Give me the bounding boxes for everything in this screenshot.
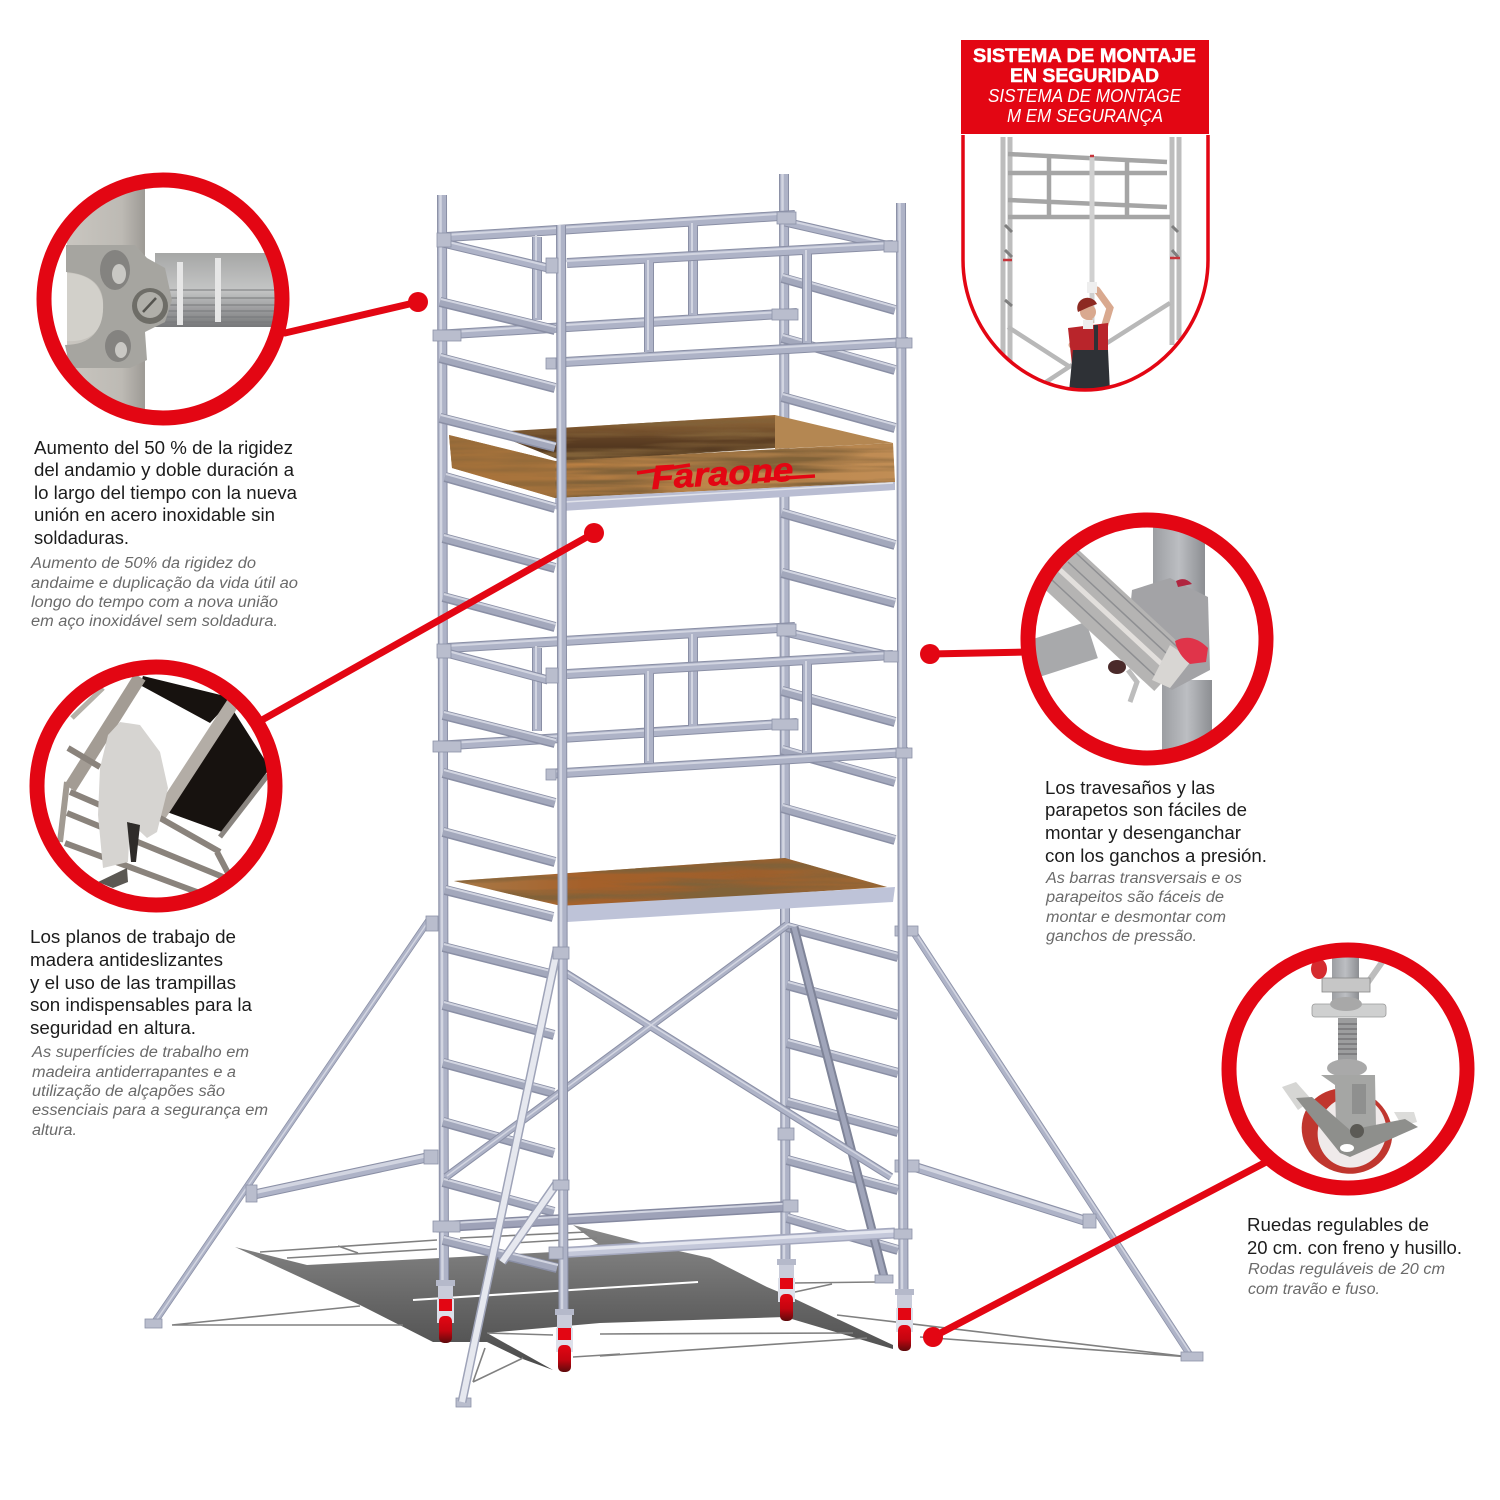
leader line: platform callout xyxy=(262,523,604,720)
rear uprights xyxy=(440,174,786,1292)
text: platform description: madera antideslizantes xyxy=(30,949,223,970)
text: platform description: Los planos de trabajo de xyxy=(30,926,236,947)
text: platform description: y el uso de las trampillas xyxy=(30,972,236,993)
text: joint description: unión en acero inoxidable sin xyxy=(34,504,275,525)
leader line: wheel callout xyxy=(923,1161,1268,1347)
text: platform description: essenciais para a segurança em xyxy=(32,1102,268,1119)
text: platform description: son indispensables para la xyxy=(30,994,253,1015)
text: wheel description: Ruedas regulables de xyxy=(1247,1214,1429,1235)
photo: hook joint xyxy=(1036,528,1212,750)
front uprights xyxy=(560,203,904,1322)
text: joint description: soldaduras. xyxy=(34,527,129,548)
leader line: hook callout xyxy=(920,644,1028,664)
text: platform description: altura. xyxy=(32,1122,77,1139)
ground shadow xyxy=(172,1225,1190,1382)
shield photo: worker raising tower xyxy=(1000,137,1182,388)
text: joint description: Aumento de 50% da rigidez do xyxy=(30,555,256,572)
text: joint description: lo largo del tiempo con la nueva xyxy=(34,482,298,503)
text: wheel description: Rodas reguláveis de 20 cm xyxy=(1248,1261,1445,1278)
callout: stainless steel joint detail xyxy=(37,173,289,425)
castor wheels xyxy=(436,1259,914,1372)
shield header: SISTEMA DE MONTAGE xyxy=(988,85,1182,106)
callout: pressure hook detail xyxy=(1022,513,1274,765)
ring xyxy=(37,667,275,905)
ring xyxy=(44,180,282,418)
text: hook description: ganchos de pressão. xyxy=(1046,928,1197,945)
scaffold tower xyxy=(145,174,1203,1407)
front outrigger xyxy=(462,950,557,1402)
text: hook description: As barras transversais e os xyxy=(1045,870,1242,887)
text: joint description: del andamio y doble duración a xyxy=(34,459,295,480)
front guard rails xyxy=(546,243,908,774)
callout: trapdoor platform detail xyxy=(31,660,283,912)
text: hook description xyxy=(1045,777,1267,945)
upper wooden platform xyxy=(449,415,895,511)
text: platform description xyxy=(30,926,268,1139)
side guard rails xyxy=(443,220,891,680)
wheel: front left xyxy=(555,1309,574,1372)
text: hook description: parapeitos são fáceis de xyxy=(1045,889,1224,906)
text: hook description: montar y desenganchar xyxy=(1045,822,1241,843)
lower wooden platform xyxy=(454,858,895,922)
rear guard rails xyxy=(435,213,797,746)
text: platform description: utilização de alçapões são xyxy=(32,1083,225,1100)
faraone logo: Faraone xyxy=(650,451,794,496)
shield header xyxy=(961,40,1209,134)
text: platform description: seguridad en altura. xyxy=(30,1017,196,1038)
rail clamps xyxy=(433,212,912,1259)
shield header: SISTEMA DE MONTAJE xyxy=(973,45,1196,67)
side outriggers xyxy=(154,919,1191,1355)
wheel: rear right xyxy=(777,1259,796,1321)
ring xyxy=(1229,950,1467,1188)
text: wheel description: com travão e fuso. xyxy=(1248,1281,1380,1298)
diagonal braces xyxy=(446,924,892,1177)
text: joint description: Aumento del 50 % de la rigidez xyxy=(34,437,293,458)
outrigger feet xyxy=(145,916,1203,1407)
text: wheel description: 20 cm. con freno y husillo. xyxy=(1247,1237,1462,1258)
shield header: M EM SEGURANÇA xyxy=(1007,105,1163,126)
photo: worker climbing through trapdoor xyxy=(58,676,268,892)
text: joint description: andaime e duplicação da vida útil ao xyxy=(31,575,298,592)
text: platform description: As superfícies de trabalho em xyxy=(31,1044,249,1061)
text: wheel description xyxy=(1247,1214,1462,1298)
rear stabilizer xyxy=(794,927,884,1277)
text: hook description: con los ganchos a presión. xyxy=(1045,845,1267,866)
photo: joint xyxy=(65,189,274,409)
right frame rungs xyxy=(782,275,899,1250)
ring xyxy=(1028,520,1266,758)
text: joint description xyxy=(30,437,298,630)
shield outline xyxy=(963,135,1208,390)
text: platform description: madeira antiderrapantes e a xyxy=(32,1064,236,1081)
left frame rungs xyxy=(440,299,558,1268)
leader line: joint callout xyxy=(285,292,428,333)
wheel: rear left xyxy=(436,1280,455,1343)
lower horizontal rails xyxy=(436,1203,895,1253)
photo: castor wheel xyxy=(1282,958,1418,1174)
text: joint description: em aço inoxidável sem soldadura. xyxy=(31,613,278,630)
text: hook description: Los travesaños y las xyxy=(1045,777,1215,798)
shield header: EN SEGURIDAD xyxy=(1010,65,1159,87)
wheel: front right xyxy=(895,1289,914,1351)
text: hook description: parapetos son fáciles de xyxy=(1045,799,1247,820)
panel: safety assembly shield xyxy=(961,40,1209,392)
text: joint description: longo do tempo com a nova união xyxy=(31,594,278,611)
callout: adjustable wheel detail xyxy=(1222,943,1474,1195)
text: hook description: montar e desmontar com xyxy=(1046,909,1226,926)
